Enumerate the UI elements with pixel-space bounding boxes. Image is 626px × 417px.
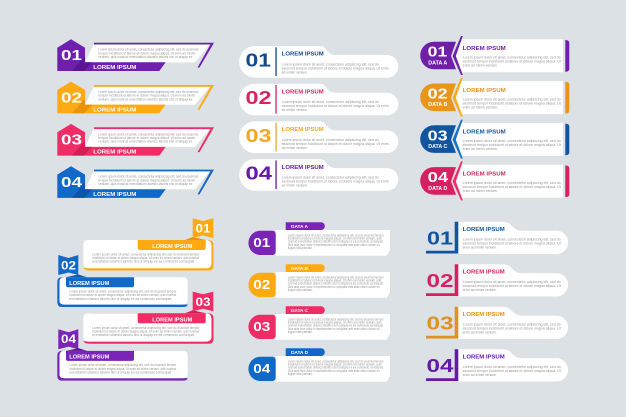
- panel: data cards with chevrons: [420, 36, 569, 200]
- row data B: [248, 264, 390, 298]
- row data C: nostrud exercitation ullamco laboris nisi ut aliquip ex ea commodo consequat.: [288, 324, 384, 328]
- row data B: nostrud exercitation ullamco laboris nisi ut aliquip ex ea commodo consequat.: [288, 282, 384, 286]
- bracket item 04: [426, 349, 568, 382]
- bracket item 02: [426, 264, 568, 296]
- banner 04: tempor incididunt ut labore et dolore magna aliqua. Ut enim ad minim: [98, 178, 196, 182]
- banner 01: 01: [61, 47, 82, 64]
- banner 03: tempor incididunt ut labore et dolore magna aliqua. Ut enim ad minim: [98, 136, 196, 140]
- banner 04: Lorem ipsum dolor sit amet, consectetur adipiscing elit, sed do eiusmod: [98, 175, 199, 179]
- banner 01: LOREM IPSUM: [93, 65, 136, 71]
- row data C: DATA C: [291, 308, 309, 313]
- banner 01: veniam, quis nostrud exercitation ullamco laboris nisi ut aliquip ex: [98, 55, 193, 59]
- bracket item 02: eiusmod tempor incididunt ut labore et dolore magna aliqua. Ut: [463, 284, 561, 288]
- tab 02: Lorem ipsum dolor sit amet, consectetur adipiscing elit, sed do: [282, 100, 379, 104]
- bracket item 03: eiusmod tempor incididunt ut labore et dolore magna aliqua. Ut: [463, 326, 561, 330]
- row data D: 04: [253, 362, 270, 376]
- banner 02: 02: [61, 89, 82, 106]
- banner 04: veniam, quis nostrud exercitation ullamco laboris nisi ut aliquip ex: [98, 182, 193, 186]
- bracket item 03: [426, 307, 568, 339]
- bracket item 04: enim ad minim veniam.: [463, 373, 497, 377]
- tab 01: Lorem ipsum dolor sit amet, consectetur adipiscing elit, sed do: [282, 62, 379, 66]
- row data B: Duis aute irure dolor in reprehenderit in voluptate velit esse cillum dolore eu: [288, 285, 380, 289]
- bracket item 01: LOREM IPSUM: [463, 227, 505, 233]
- banner 01: tempor incididunt ut labore et dolore magna aliqua. Ut enim ad minim: [98, 51, 196, 55]
- panel: corner bracket list: [426, 222, 568, 382]
- card data D: Lorem ipsum dolor sit amet, consectetur adipiscing elit, sed do: [463, 181, 561, 185]
- card data B: 02: [428, 86, 448, 102]
- row data A: nostrud exercitation ullamco laboris nisi ut aliquip ex ea commodo consequat.: [288, 240, 384, 244]
- banner 02: Lorem ipsum dolor sit amet, consectetur adipiscing elit, sed do eiusmod: [98, 90, 199, 94]
- card data B: LOREM IPSUM: [463, 88, 506, 94]
- card data D: enim ad minim veniam.: [463, 189, 498, 193]
- card data B: [420, 78, 569, 117]
- banner 03: [57, 124, 214, 156]
- tab 01: ad minim veniam.: [282, 70, 308, 74]
- bracket item 01: [426, 222, 568, 254]
- tab 02: eiusmod tempor incididunt ut labore et dolore magna aliqua. Ut enim: [282, 104, 389, 108]
- tab 04: [239, 159, 398, 191]
- flag card 02: LOREM IPSUM: [69, 281, 109, 287]
- flag card 03: exercitation ullamco laboris nisi ut aliquip ex ea commodo consequat: [92, 333, 194, 337]
- flag card 01: incididunt ut labore et dolore magna aliqua. Ut enim ad minim veniam, quis nostrud: [92, 256, 199, 260]
- row data A: 01: [253, 236, 270, 250]
- banner 01: Lorem ipsum dolor sit amet, consectetur adipiscing elit, sed do eiusmod: [98, 48, 199, 52]
- flag card 01: LOREM IPSUM: [152, 244, 192, 250]
- row data A: fugiat nulla pariatur.: [288, 246, 313, 250]
- bracket item 02: Lorem ipsum dolor sit amet, consectetur adipiscing elit, sed do: [463, 280, 561, 284]
- card data B: Lorem ipsum dolor sit amet, consectetur adipiscing elit, sed do: [463, 97, 561, 101]
- panel: hexagon banners: [57, 39, 214, 198]
- banner 03: veniam, quis nostrud exercitation ullamco laboris nisi ut aliquip ex: [98, 140, 193, 144]
- flag card 04: incididunt ut labore et dolore magna aliqua. Ut enim ad minim veniam, quis nostrud: [69, 367, 176, 371]
- bracket item 03: LOREM IPSUM: [463, 312, 505, 318]
- flag card 01: exercitation ullamco laboris nisi ut aliquip ex ea commodo consequat: [92, 260, 194, 264]
- bracket item 03: enim ad minim veniam.: [463, 330, 497, 334]
- bracket item 01: Lorem ipsum dolor sit amet, consectetur adipiscing elit, sed do: [463, 238, 561, 242]
- flag card 02: Lorem ipsum dolor sit amet, consectetur adipiscing elit, sed do eiusmod tempor: [69, 290, 177, 294]
- flag card 04: [57, 329, 188, 381]
- bracket item 01: eiusmod tempor incididunt ut labore et dolore magna aliqua. Ut: [463, 242, 561, 246]
- flag card 03: Lorem ipsum dolor sit amet, consectetur adipiscing elit, sed do eiusmod tempor: [92, 326, 200, 330]
- flag card 03: LOREM IPSUM: [152, 317, 192, 323]
- tab 01: LOREM IPSUM: [282, 52, 324, 58]
- bracket item 04: LOREM IPSUM: [463, 354, 505, 360]
- bracket item 02: 02: [426, 271, 454, 291]
- row data C: [248, 306, 390, 340]
- row data B: DATA B: [291, 266, 308, 271]
- flag card 04: Lorem ipsum dolor sit amet, consectetur adipiscing elit, sed do eiusmod tempor: [69, 363, 177, 367]
- bracket item 01: 01: [427, 228, 453, 248]
- tab 04: ad minim veniam.: [282, 184, 308, 188]
- panel: rounded tab list: [239, 46, 398, 191]
- banner 03: Lorem ipsum dolor sit amet, consectetur adipiscing elit, sed do eiusmod: [98, 132, 199, 136]
- flag card 01: [83, 218, 214, 270]
- tab 03: [239, 121, 398, 153]
- banner 04: LOREM IPSUM: [93, 192, 136, 198]
- bracket item 02: enim ad minim veniam.: [463, 288, 497, 292]
- tab 01: eiusmod tempor incididunt ut labore et dolore magna aliqua. Ut enim: [282, 66, 389, 70]
- tab 02: ad minim veniam.: [282, 108, 308, 112]
- row data D: [248, 348, 390, 382]
- banner 02: veniam, quis nostrud exercitation ullamco laboris nisi ut aliquip ex: [98, 97, 193, 101]
- card data C: Lorem ipsum dolor sit amet, consectetur adipiscing elit, sed do: [463, 139, 561, 143]
- banner 03: LOREM IPSUM: [93, 150, 136, 156]
- row data A: DATA A: [291, 224, 309, 229]
- card data B: DATA B: [428, 102, 448, 108]
- tab 03: Lorem ipsum dolor sit amet, consectetur adipiscing elit, sed do: [282, 138, 379, 142]
- flag card 03: incididunt ut labore et dolore magna aliqua. Ut enim ad minim veniam, quis nostrud: [92, 329, 199, 333]
- flag card 04: exercitation ullamco laboris nisi ut aliquip ex ea commodo consequat: [69, 370, 171, 374]
- banner 02: LOREM IPSUM: [93, 107, 136, 113]
- bracket item 02: LOREM IPSUM: [463, 270, 505, 276]
- card data C: enim ad minim veniam.: [463, 147, 498, 151]
- row data C: incididunt ut labore et dolore magna aliqua. Ut enim ad minim veniam, quis: [288, 321, 382, 325]
- card data D: eiusmod tempor incididunt ut labore et dolore magna aliqua. Ut: [463, 185, 561, 189]
- card data D: LOREM IPSUM: [463, 171, 506, 177]
- banner 04: [57, 166, 214, 198]
- card data D: 04: [428, 170, 448, 186]
- row data A: Duis aute irure dolor in reprehenderit in voluptate velit esse cillum dolore eu: [288, 243, 380, 247]
- flag card 02: 02: [61, 258, 76, 272]
- card data A: enim ad minim veniam.: [463, 64, 498, 68]
- row data D: DATA D: [291, 350, 308, 355]
- flag card 02: [57, 255, 188, 307]
- row data D: Duis aute irure dolor in reprehenderit in voluptate velit esse cillum dolore eu: [288, 369, 380, 373]
- tab 03: eiusmod tempor incididunt ut labore et dolore magna aliqua. Ut enim: [282, 142, 389, 146]
- card data A: DATA A: [428, 60, 448, 66]
- banner 02: tempor incididunt ut labore et dolore magna aliqua. Ut enim ad minim: [98, 94, 196, 98]
- card data B: enim ad minim veniam.: [463, 105, 498, 109]
- tab 01: [239, 46, 398, 78]
- bracket item 04: Lorem ipsum dolor sit amet, consectetur adipiscing elit, sed do: [463, 365, 561, 369]
- row data A: Lorem ipsum dolor sit amet, consectetur adipiscing elit, sed do eiusmod tempor: [288, 234, 385, 238]
- bracket item 04: eiusmod tempor incididunt ut labore et dolore magna aliqua. Ut: [463, 369, 561, 373]
- row data D: nostrud exercitation ullamco laboris nisi ut aliquip ex ea commodo consequat.: [288, 366, 384, 370]
- tab 04: LOREM IPSUM: [282, 165, 324, 171]
- banner 02: [57, 82, 214, 113]
- card data D: [420, 161, 569, 200]
- panel: flag tag cards: [57, 218, 213, 381]
- flag card 03: [83, 292, 214, 344]
- card data A: [420, 36, 569, 75]
- bracket item 03: Lorem ipsum dolor sit amet, consectetur adipiscing elit, sed do: [463, 322, 561, 326]
- tab 03: 03: [246, 126, 272, 146]
- row data D: fugiat nulla pariatur.: [288, 372, 313, 376]
- row data B: Lorem ipsum dolor sit amet, consectetur adipiscing elit, sed do eiusmod tempor: [288, 276, 385, 280]
- tab 03: LOREM IPSUM: [282, 127, 324, 133]
- bracket item 03: 03: [426, 313, 454, 333]
- tab 04: 04: [246, 164, 272, 184]
- tab 01: 01: [246, 50, 271, 70]
- card data B: eiusmod tempor incididunt ut labore et dolore magna aliqua. Ut: [463, 101, 561, 105]
- card data A: Lorem ipsum dolor sit amet, consectetur adipiscing elit, sed do: [463, 56, 561, 60]
- flag card 03: 03: [196, 295, 211, 309]
- banner 03: 03: [61, 132, 82, 149]
- tab 03: ad minim veniam.: [282, 146, 308, 150]
- row data B: fugiat nulla pariatur.: [288, 288, 313, 292]
- flag card 01: 01: [196, 222, 211, 236]
- row data D: Lorem ipsum dolor sit amet, consectetur adipiscing elit, sed do eiusmod tempor: [288, 360, 385, 364]
- flag card 01: Lorem ipsum dolor sit amet, consectetur adipiscing elit, sed do eiusmod tempor: [92, 252, 200, 256]
- card data A: eiusmod tempor incididunt ut labore et dolore magna aliqua. Ut: [463, 60, 561, 64]
- row data B: incididunt ut labore et dolore magna aliqua. Ut enim ad minim veniam, quis: [288, 279, 382, 283]
- row data C: Duis aute irure dolor in reprehenderit in voluptate velit esse cillum dolore eu: [288, 327, 380, 331]
- card data C: [420, 120, 569, 159]
- tab 02: LOREM IPSUM: [282, 89, 324, 95]
- card data C: DATA C: [428, 144, 448, 150]
- card data A: LOREM IPSUM: [463, 46, 506, 52]
- tab 02: [239, 84, 398, 115]
- tab 04: eiusmod tempor incididunt ut labore et dolore magna aliqua. Ut enim: [282, 180, 389, 184]
- row data B: 02: [253, 278, 270, 292]
- row data A: incididunt ut labore et dolore magna aliqua. Ut enim ad minim veniam, quis: [288, 237, 382, 241]
- panel: circular badge rows: [248, 222, 390, 382]
- bracket item 04: 04: [426, 356, 454, 376]
- row data C: fugiat nulla pariatur.: [288, 330, 313, 334]
- card data D: DATA D: [428, 186, 448, 192]
- card data C: 03: [428, 128, 448, 144]
- banner 01: [57, 39, 214, 71]
- flag card 02: incididunt ut labore et dolore magna aliqua. Ut enim ad minim veniam, quis nostrud: [69, 293, 176, 297]
- row data D: incididunt ut labore et dolore magna aliqua. Ut enim ad minim veniam, quis: [288, 363, 382, 367]
- row data C: 03: [253, 320, 270, 334]
- tab 02: 02: [246, 88, 272, 108]
- row data C: Lorem ipsum dolor sit amet, consectetur adipiscing elit, sed do eiusmod tempor: [288, 318, 385, 322]
- card data C: eiusmod tempor incididunt ut labore et dolore magna aliqua. Ut: [463, 143, 561, 147]
- banner 04: 04: [61, 174, 83, 191]
- card data C: LOREM IPSUM: [463, 130, 506, 136]
- flag card 02: exercitation ullamco laboris nisi ut aliquip ex ea commodo consequat: [69, 297, 171, 301]
- bracket item 01: enim ad minim veniam.: [463, 245, 497, 249]
- tab 04: Lorem ipsum dolor sit amet, consectetur adipiscing elit, sed do: [282, 176, 379, 180]
- flag card 04: 04: [61, 332, 76, 346]
- card data A: 01: [428, 45, 447, 61]
- row data A: [248, 222, 390, 256]
- flag card 04: LOREM IPSUM: [69, 355, 109, 361]
